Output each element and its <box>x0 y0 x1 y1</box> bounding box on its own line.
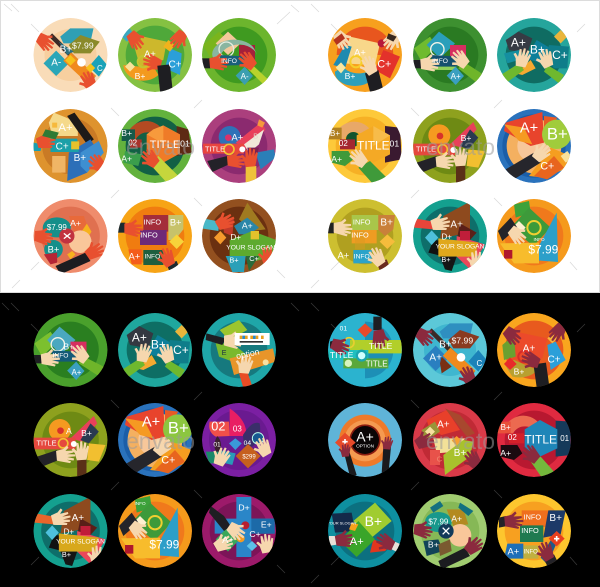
labels: C+ <box>173 343 189 357</box>
labels: A+ <box>132 331 147 345</box>
labels: D+ <box>238 502 250 512</box>
shapes <box>352 215 395 263</box>
badge 22: olive megaphone <box>34 403 107 477</box>
shapes <box>121 496 179 558</box>
labels: INFO <box>53 352 68 359</box>
shapes <box>422 408 475 475</box>
labels: A+ <box>354 48 366 58</box>
labels: A+ <box>437 419 450 430</box>
labels <box>337 217 393 261</box>
labels: C+ <box>249 254 259 263</box>
labels <box>514 344 561 376</box>
labels: 02 <box>339 139 348 148</box>
labels: INFO <box>521 526 539 535</box>
badge 5: green title hexagon <box>118 109 192 184</box>
panel: bottom badges start — badge 19: green info <box>34 313 107 387</box>
labels: A+ <box>144 49 156 59</box>
hands <box>140 149 178 182</box>
hands <box>338 436 394 477</box>
shapes <box>504 112 572 179</box>
labels: A+ <box>350 536 364 548</box>
labels: B+ <box>454 448 466 459</box>
labels: A+ <box>520 121 538 137</box>
labels: B+ <box>60 44 72 55</box>
shapes <box>49 113 104 181</box>
labels <box>135 50 181 79</box>
panel: black background <box>0 293 600 587</box>
labels: A+ <box>242 221 253 231</box>
shapes <box>215 497 275 557</box>
hands <box>333 30 400 92</box>
hands <box>414 211 485 270</box>
labels: $7.99 <box>428 517 449 526</box>
labels: B+ <box>151 337 166 351</box>
labels <box>500 423 570 458</box>
labels: C <box>476 359 482 368</box>
shapes <box>328 122 402 166</box>
hands <box>206 331 254 387</box>
labels: B+ <box>121 128 132 138</box>
labels: B+ <box>501 423 511 432</box>
labels: TITLE <box>524 432 557 446</box>
badge 8: orange info boxes <box>118 199 192 273</box>
shapes <box>425 202 485 271</box>
labels: TITLE <box>330 350 354 360</box>
labels: B+ <box>229 256 239 265</box>
labels: B+ <box>74 153 86 164</box>
labels: B+ <box>461 133 471 143</box>
watermark: envato marks: envato <box>126 134 195 160</box>
labels <box>330 326 393 369</box>
labels: B+ <box>63 341 74 351</box>
labels <box>416 133 471 154</box>
hands <box>35 506 105 565</box>
labels: A+ <box>72 513 84 524</box>
hands <box>34 227 107 274</box>
badge 28: cyan title bands <box>328 313 402 387</box>
labels: B+ <box>81 428 92 438</box>
shapes <box>332 503 392 557</box>
labels: A- <box>241 72 249 81</box>
labels <box>345 49 391 79</box>
badge 10: orange option badge <box>328 18 405 92</box>
labels: 04 <box>244 440 251 447</box>
badge 12: teal A B C badge <box>497 18 571 92</box>
hands <box>34 342 107 378</box>
labels: 01 <box>390 139 399 149</box>
hands <box>498 218 531 248</box>
labels: OPTION <box>356 443 374 448</box>
badge 6: magenta megaphone badge <box>202 109 276 183</box>
labels: YOUR SLOGAN <box>226 244 275 251</box>
labels <box>437 419 466 464</box>
labels: A+ <box>451 72 461 81</box>
shapes <box>44 28 107 80</box>
hands <box>517 442 554 478</box>
labels: B+ <box>62 550 71 559</box>
shapes <box>43 216 91 264</box>
labels: A+ <box>128 251 140 261</box>
labels: C <box>97 64 103 73</box>
labels: INFO <box>432 58 448 65</box>
panel: white background <box>0 0 600 292</box>
hands <box>202 52 268 84</box>
hands <box>500 321 570 387</box>
labels: B+ <box>380 217 393 228</box>
labels <box>132 331 189 357</box>
labels: B+ <box>135 71 145 81</box>
badge 14: olive megaphone <box>413 109 487 183</box>
labels: B+ <box>330 129 340 138</box>
shapes <box>206 408 264 468</box>
labels: A+ <box>356 429 374 445</box>
labels: TITLE <box>357 138 390 152</box>
labels: 02 <box>128 139 138 148</box>
labels: INFO <box>533 237 545 242</box>
shapes <box>504 30 569 75</box>
shapes <box>502 332 566 378</box>
badge 36: yellow info boxes <box>497 494 571 568</box>
labels: A <box>66 426 72 436</box>
labels: INFO <box>353 217 371 226</box>
badge 31: blue ring with black center <box>328 403 402 477</box>
labels <box>222 346 260 361</box>
hands <box>122 341 185 378</box>
shapes <box>413 122 485 168</box>
hands <box>345 146 387 184</box>
labels: 02 <box>508 433 517 442</box>
badge 23: blue ring A B C <box>118 403 192 477</box>
labels: A+ <box>331 154 342 164</box>
labels: B+ <box>514 366 524 376</box>
badge 24: purple numbered petals <box>202 403 276 477</box>
labels: B+ <box>168 418 189 437</box>
labels <box>327 513 382 548</box>
badge 2: green option badge <box>118 18 192 92</box>
labels: INFO <box>144 254 160 261</box>
labels: INFO <box>140 231 158 240</box>
badge 29: cyan price badge <box>413 313 487 389</box>
labels: E <box>222 348 227 357</box>
labels: TITLE <box>366 360 388 369</box>
labels: INFO <box>221 58 237 65</box>
badge 15: blue ring A B C <box>497 109 572 183</box>
hands <box>506 139 554 179</box>
labels: INFO <box>351 231 369 240</box>
hands <box>209 506 276 555</box>
badge 4: amber hexagon badge <box>34 109 109 183</box>
badge 21: teal option card <box>202 313 276 387</box>
labels: A+ <box>222 535 234 545</box>
labels <box>56 124 86 161</box>
shapes <box>497 416 571 460</box>
labels: B+ <box>530 42 545 56</box>
shapes <box>500 201 558 263</box>
labels: A+ <box>429 353 442 364</box>
labels: A+ <box>507 546 519 556</box>
labels <box>520 121 568 172</box>
labels: 03 <box>233 425 242 434</box>
labels <box>56 513 105 559</box>
labels: $7.99 <box>528 243 559 257</box>
shapes <box>335 433 356 452</box>
hands <box>127 433 175 473</box>
labels: D+ <box>441 232 452 241</box>
labels: C+ <box>168 60 182 71</box>
badge 25: teal slogan <box>34 494 107 568</box>
labels: C+ <box>249 529 261 539</box>
watermark: envato marks: envato <box>426 428 495 454</box>
hands <box>499 511 557 566</box>
labels: INFO <box>524 512 541 521</box>
hands <box>210 435 275 468</box>
badge 17: teal slogan badge <box>413 199 487 273</box>
labels: B+ <box>441 255 451 264</box>
labels <box>134 501 180 552</box>
labels: E+ <box>261 520 272 530</box>
badge 33: red title hexagon <box>497 403 571 478</box>
labels <box>432 58 461 81</box>
shapes <box>128 215 184 265</box>
labels: INFO <box>524 550 538 556</box>
labels: B+ <box>48 245 59 255</box>
labels: $7.99 <box>47 223 67 232</box>
labels: D+ <box>230 233 241 242</box>
labels: B+ <box>428 540 439 550</box>
shapes <box>35 327 86 380</box>
labels: C+ <box>56 141 69 152</box>
labels: INFO <box>134 501 146 506</box>
labels: B+ <box>547 124 568 143</box>
labels: TITLE <box>205 145 225 154</box>
shapes <box>423 501 473 556</box>
shapes <box>216 320 276 375</box>
badge 26: orange price <box>118 494 192 568</box>
labels: C+ <box>547 355 561 366</box>
labels: C+ <box>161 454 175 466</box>
hands <box>328 219 390 271</box>
labels: TITLE <box>150 139 181 151</box>
labels: A+ <box>523 344 535 355</box>
shapes <box>34 416 105 462</box>
labels <box>330 129 399 164</box>
labels: A+ <box>500 448 511 458</box>
labels: B+ <box>365 513 382 529</box>
labels: A+ <box>337 251 349 261</box>
labels: A+ <box>58 122 73 134</box>
labels: INFO <box>144 217 161 226</box>
watermark: envato marks: envato <box>426 134 495 160</box>
labels <box>205 134 258 152</box>
shapes <box>333 37 400 86</box>
hands <box>119 513 152 543</box>
shapes <box>127 325 190 370</box>
labels <box>142 415 189 466</box>
labels: 01 <box>340 326 347 333</box>
hands <box>126 29 187 92</box>
labels <box>37 426 92 448</box>
labels <box>507 512 562 556</box>
hands <box>37 441 90 477</box>
labels: B+ <box>170 217 182 227</box>
labels: option <box>235 346 260 361</box>
shapes <box>125 406 192 473</box>
labels: B+ <box>345 71 355 81</box>
labels <box>128 217 182 261</box>
labels: 01 <box>180 138 190 148</box>
labels: YOUR SLOGAN <box>436 244 485 251</box>
shapes <box>120 28 182 81</box>
shapes <box>46 497 105 566</box>
labels: C <box>437 455 443 464</box>
labels: TITLE <box>369 341 393 351</box>
hands <box>36 32 96 88</box>
badge 18: orange price badge <box>497 199 571 273</box>
badge 34: teal squares <box>327 494 402 568</box>
card <box>235 333 270 345</box>
labels: C+ <box>377 59 391 71</box>
labels: C+ <box>552 48 568 62</box>
badge 9: brown slogan badge <box>202 199 277 273</box>
labels <box>122 130 190 162</box>
shapes <box>122 121 192 166</box>
shapes <box>203 119 276 169</box>
badge 27: magenta cross <box>202 494 276 568</box>
badge 35: green price badge <box>413 494 487 569</box>
hands <box>207 147 259 183</box>
labels <box>222 502 272 545</box>
labels: A+ <box>121 153 132 163</box>
shapes <box>504 510 566 564</box>
shapes <box>203 32 257 85</box>
labels: A+ <box>71 368 82 377</box>
labels: $7.99 <box>451 335 473 345</box>
hands <box>329 317 391 358</box>
labels <box>429 335 482 368</box>
badge 1: peach pricing badge <box>33 18 107 94</box>
badge 32: red option ribbons <box>412 403 487 477</box>
labels: B+ <box>439 339 452 350</box>
hands <box>34 129 104 172</box>
shapes <box>423 323 487 375</box>
badge 13: yellow title hexagon <box>328 109 402 184</box>
labels <box>211 420 256 460</box>
labels: YOUR SLOGAN <box>327 520 356 525</box>
labels: INFO <box>354 254 370 261</box>
hands <box>417 147 469 183</box>
watermark: envato marks <box>126 134 495 454</box>
labels: 02 <box>211 420 225 434</box>
labels <box>51 42 102 71</box>
labels: 01 <box>213 442 221 449</box>
labels: D+ <box>64 527 74 536</box>
hands <box>328 529 401 554</box>
labels: B <box>253 132 258 141</box>
hands <box>413 520 486 569</box>
labels <box>428 514 462 550</box>
labels: $7.99 <box>149 538 180 552</box>
hands <box>118 219 180 273</box>
shapes <box>214 203 276 272</box>
labels <box>436 220 485 264</box>
labels <box>53 341 82 377</box>
labels: $7.99 <box>72 40 94 50</box>
labels <box>222 58 248 79</box>
badge 7: coral price badge <box>34 199 107 274</box>
labels: A+ <box>451 514 462 524</box>
labels: A- <box>51 58 61 69</box>
labels: A+ <box>511 36 526 50</box>
hands <box>501 46 564 83</box>
watermark: envato marks: envato <box>126 428 195 454</box>
labels: B+ <box>549 513 562 524</box>
labels: C+ <box>540 160 554 172</box>
labels: YOUR SLOGAN <box>56 539 105 546</box>
labels: $299 <box>242 454 256 460</box>
labels: A+ <box>450 220 463 231</box>
badge 20: teal A B C <box>118 313 192 387</box>
labels: A+ <box>142 415 160 431</box>
hands <box>412 428 485 473</box>
badge 16: olive info boxes <box>328 199 402 273</box>
labels <box>511 36 568 62</box>
labels: TITLE <box>416 145 436 154</box>
shapes <box>328 323 402 368</box>
labels <box>47 220 80 252</box>
hands <box>203 212 274 264</box>
shapes <box>414 32 466 85</box>
hands <box>413 47 487 87</box>
labels: A+ <box>70 218 81 228</box>
labels: A+ <box>231 133 243 143</box>
badge 30: orange option badge <box>497 313 571 387</box>
hands <box>413 324 479 389</box>
badge 3: green info badge <box>202 18 276 92</box>
labels <box>226 222 274 262</box>
labels: TITLE <box>37 439 57 448</box>
labels: 01 <box>560 434 570 443</box>
badge 11: dark green info badge <box>413 18 487 92</box>
